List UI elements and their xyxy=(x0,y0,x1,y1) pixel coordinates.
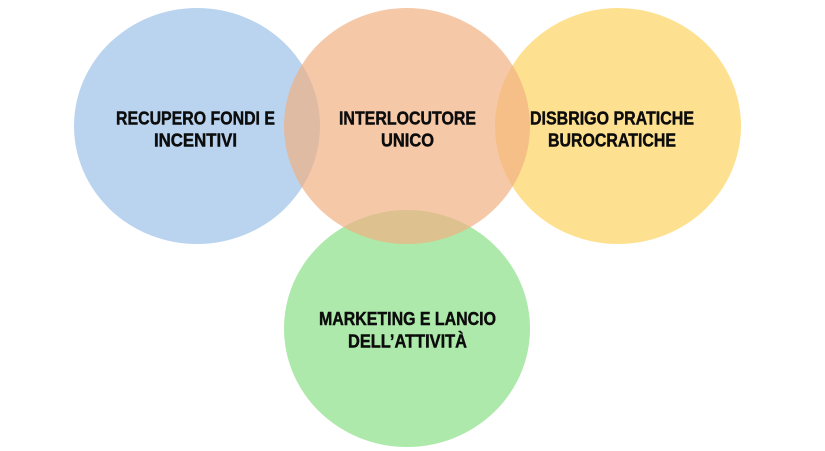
label: interlocutore unico: UNICO xyxy=(381,130,434,150)
circle: disbrigo pratiche burocratiche xyxy=(495,8,741,244)
label: disbrigo pratiche burocratiche: DISBRIGO PRATICHE xyxy=(530,108,694,128)
label: recupero fondi e incentivi xyxy=(116,108,275,150)
circle: interlocutore unico xyxy=(284,8,530,244)
circle: marketing e lancio xyxy=(284,210,530,447)
label: interlocutore unico: INTERLOCUTORE xyxy=(339,108,476,128)
label: interlocutore unico xyxy=(339,108,476,150)
label: disbrigo pratiche burocratiche xyxy=(530,108,694,150)
label: recupero fondi e incentivi: INCENTIVI xyxy=(154,130,237,150)
circle: recupero fondi e incentivi xyxy=(74,8,320,244)
label: disbrigo pratiche burocratiche: BUROCRATICHE xyxy=(548,130,676,150)
label: recupero fondi e incentivi: RECUPERO FONDI E xyxy=(116,108,275,128)
label: marketing e lancio dell'attività: DELL’ATTIVITÀ xyxy=(348,330,467,352)
label: marketing e lancio dell'attività xyxy=(319,309,496,352)
label: marketing e lancio dell'attività: MARKETING E LANCIO xyxy=(319,309,496,329)
